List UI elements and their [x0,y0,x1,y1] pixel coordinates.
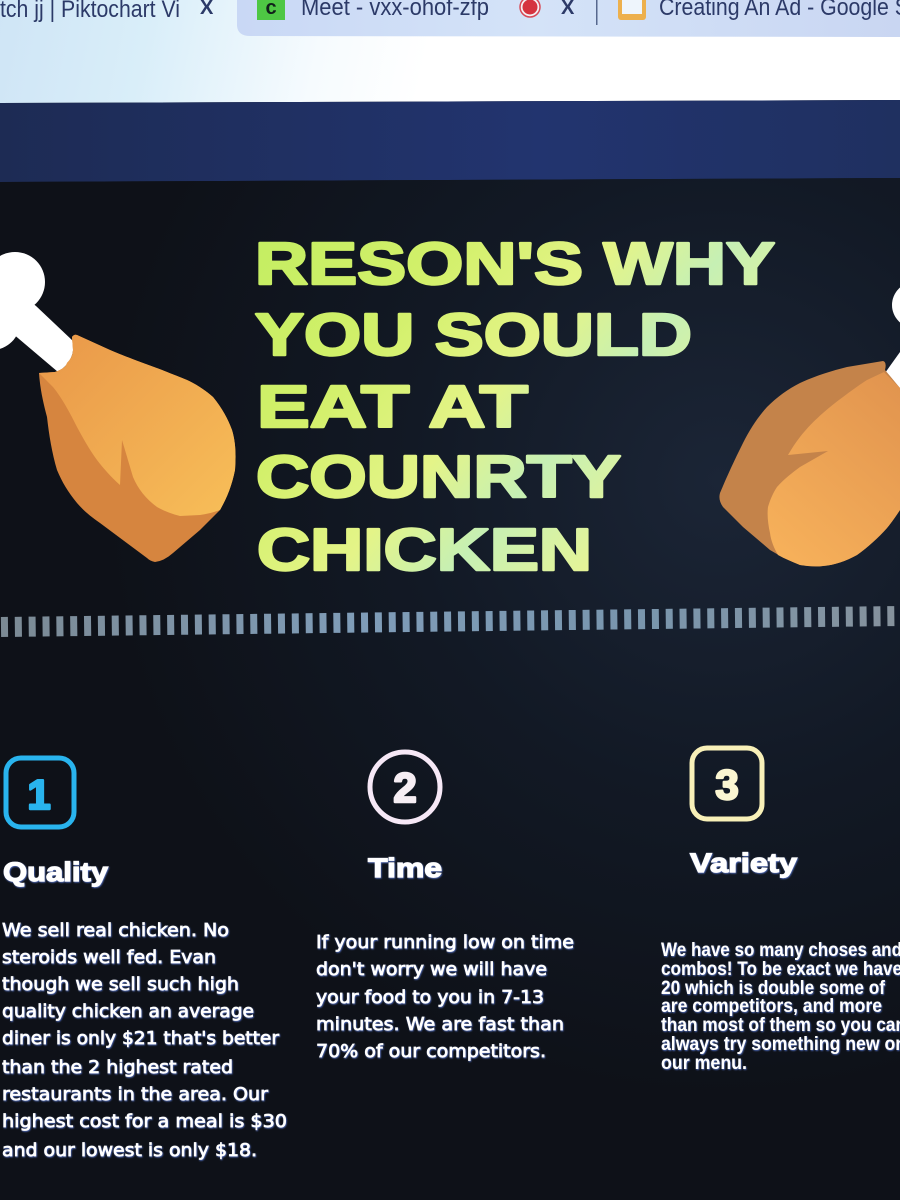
text block: Time description: don't worry we will have [316,959,547,980]
white browser toolbar band [0,0,900,103]
meat highlight [39,335,236,516]
text block: Time description: minutes. We are fast than [316,1014,564,1035]
active tab [237,0,900,37]
text block: Time description [316,932,574,1062]
title: YOU SOULD [255,302,692,368]
bone [885,352,900,388]
text block: Quality description: We sell real chicken. No [2,920,229,941]
title: CHICKEN [257,517,592,583]
number badge 2 [370,752,440,822]
panel: Quality [2,758,287,1161]
number badge 2: 2 [393,764,417,811]
text block: Time description: your food to you in 7-13 [316,987,544,1008]
panel: Time [316,752,574,1062]
bone [0,252,73,372]
title: COUNRTY [256,444,621,510]
navy page header band [0,100,900,182]
text block: Quality description: highest cost for a meal is $30 [2,1111,287,1132]
icon: slides file [618,0,646,20]
text block: Quality description: though we sell such high [2,974,239,995]
icon: recording dot [520,0,540,17]
panel: Variety [661,748,900,1074]
text block: Quality description: diner is only $21 that's better [2,1028,280,1049]
text block: Quality description: restaurants in the area. Our [2,1084,269,1105]
heading: Time: Time [368,853,442,883]
meat shadow side [719,361,900,566]
text block: Variety description: our menu. [661,1053,747,1074]
title [255,231,775,583]
heading: Variety: Variety [690,848,797,878]
icon: left chicken drumstick [0,252,236,562]
title: EAT AT [257,374,528,440]
browser tab bar [0,0,900,37]
text block: Quality description: steroids well fed. Evan [2,947,216,968]
number badge 1: 1 [27,771,51,818]
icon: right chicken drumstick [719,282,900,566]
text block: Quality description: quality chicken an average [2,1001,254,1022]
text block: Variety description [661,940,900,1074]
text block: Quality description: than the 2 highest rated [2,1057,233,1078]
text block: Quality description: and our lowest is only $18. [2,1140,257,1161]
heading: Quality: Quality [3,857,108,887]
number badge 3: 3 [715,761,739,808]
text block: Quality description [2,920,287,1161]
text block: Time description: If your running low on time [316,932,574,953]
text block: Variety description: are competitors, and more [661,996,882,1017]
text block: Time description: 70% of our competitors. [316,1041,546,1062]
number badge 3 [692,748,762,819]
icon: Classroom green tile [257,0,285,20]
dashed divider [1,616,900,627]
meat highlight [768,372,900,566]
title: RESON'S WHY [255,231,775,297]
number badge 1 [6,758,74,827]
meat shadow side [39,335,236,562]
